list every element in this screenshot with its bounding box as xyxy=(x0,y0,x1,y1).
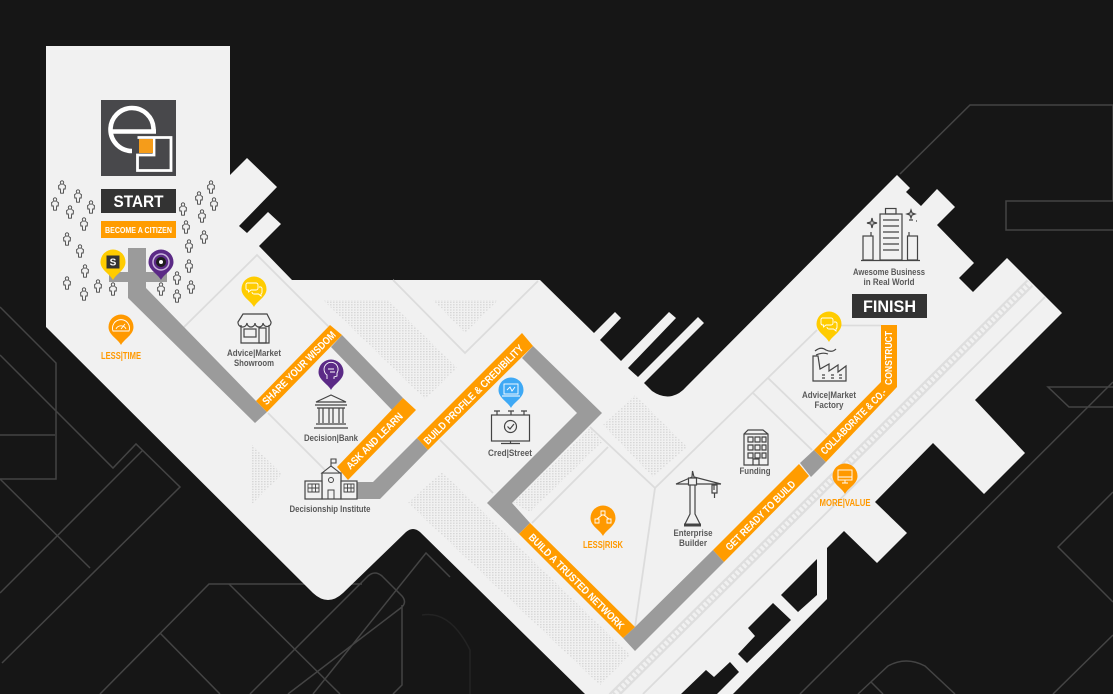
become a citizen tag xyxy=(101,221,176,238)
pin: yellow chat factory xyxy=(816,312,842,342)
start label xyxy=(101,189,176,213)
label: funding: Funding xyxy=(740,466,771,477)
band label: ask and learn: ASK AND LEARN xyxy=(344,411,406,472)
band label: collaborate: COLLABORATE & CO.- xyxy=(819,386,890,457)
icon: showroom store xyxy=(238,314,271,343)
label: advice market showroom xyxy=(227,348,282,369)
label: advice market showroom: Advice|Market xyxy=(227,348,282,359)
band label: get ready to build: GET READY TO BUILD xyxy=(723,478,799,553)
finish label xyxy=(852,294,927,318)
band label: construct: CONSTRUCT xyxy=(883,331,895,385)
route: grey path xyxy=(109,248,826,651)
streets xyxy=(183,255,1045,694)
pin: blue screen xyxy=(498,378,524,408)
label: less risk: LESS|RISK xyxy=(583,539,623,551)
label: decisionship institute: Decisionship Institute xyxy=(290,504,370,515)
label: awesome business: in Real World xyxy=(864,277,915,288)
start label: START xyxy=(114,192,164,211)
label: less time: LESS|TIME xyxy=(101,350,141,362)
icon: decision bank xyxy=(314,395,348,428)
pin: S yellow xyxy=(100,250,126,280)
label: enterprise builder: Enterprise xyxy=(674,528,712,539)
label: advice market showroom: Showroom xyxy=(234,358,274,369)
band label: share your wisdom: SHARE YOUR WISDOM xyxy=(260,329,339,408)
label: advice market factory xyxy=(802,390,857,411)
band label: build profile and credibility: BUILD PROFILE & CREDIBILITY xyxy=(422,343,526,447)
pin: S yellow: S xyxy=(110,258,117,268)
pin: chat yellow showroom xyxy=(242,276,266,307)
finish label: FINISH xyxy=(863,297,916,316)
icon: decisionship institute xyxy=(305,459,357,499)
label: awesome business xyxy=(853,267,925,288)
label: awesome business: Awesome Business xyxy=(853,267,925,278)
railway xyxy=(612,283,1030,694)
label: enterprise builder: Builder xyxy=(679,538,707,549)
label: advice market factory: Factory xyxy=(814,400,844,411)
band label: build a trusted network: BUILD A TRUSTED NETWORK xyxy=(526,532,627,632)
pin: purple eye xyxy=(148,250,174,280)
icon: cred street billboard xyxy=(492,411,530,444)
icon: awesome business skyline xyxy=(861,208,920,260)
pin: orange more value xyxy=(832,464,858,494)
logo xyxy=(101,100,176,176)
label: more value: MORE|VALUE xyxy=(820,497,870,509)
icon: factory xyxy=(813,348,846,381)
icon: funding building xyxy=(744,430,768,465)
become a citizen tag: BECOME A CITIZEN xyxy=(105,225,172,235)
label: cred street: Cred|Street xyxy=(488,448,533,459)
pin: orange network xyxy=(590,506,616,536)
pin: less time gauge xyxy=(108,314,134,345)
dotted city blocks xyxy=(252,300,687,685)
route: orange bands xyxy=(256,325,897,638)
label: decision bank: Decision|Bank xyxy=(304,433,359,444)
crowd of people xyxy=(52,181,217,302)
icon: enterprise crane xyxy=(676,471,721,525)
label: advice market factory: Advice|Market xyxy=(802,390,857,401)
pin: purple brain xyxy=(318,360,344,390)
label: enterprise builder xyxy=(674,528,712,549)
